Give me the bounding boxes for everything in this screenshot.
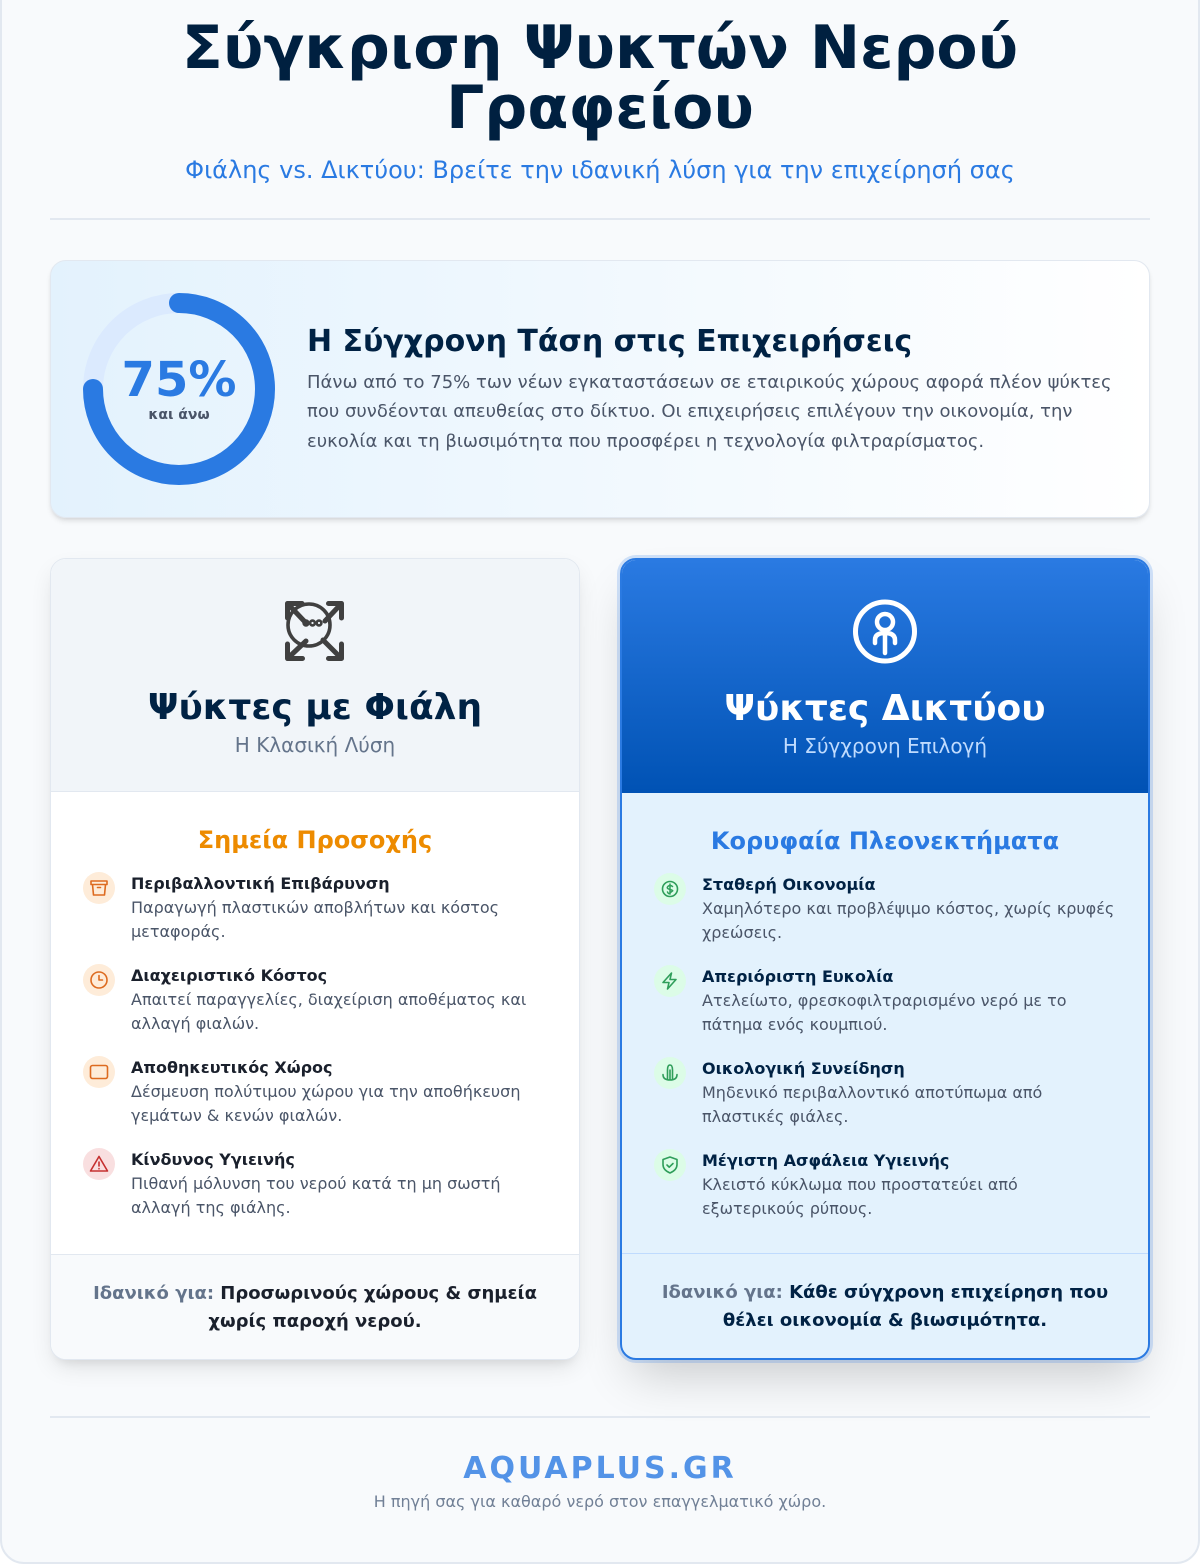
mains ideal-for footer: θέλει οικονομία & βιωσιμότητα. xyxy=(723,1310,1047,1331)
panel: mains coolers xyxy=(620,558,1150,1360)
donut caption: και άνω xyxy=(148,407,210,423)
cautions heading: Σημεία Προσοχής xyxy=(198,826,432,854)
panel: bottled coolers: αλλαγή της φιάλης. xyxy=(131,1198,291,1217)
panel: mains coolers: Οικολογική Συνείδηση xyxy=(702,1059,905,1078)
panel: bottled coolers: Παραγωγή πλαστικών αποβλήτων και κόστος xyxy=(131,898,499,917)
title: Σύγκριση Ψυκτών Νερού xyxy=(182,13,1018,83)
advantage 4 icon: shield xyxy=(654,1149,686,1181)
caution 1 icon: archive xyxy=(83,872,115,904)
advantage 1 icon: dollar xyxy=(654,873,686,905)
panel: mains coolers: Χαμηλότερο και προβλέψιμο κόστος, χωρίς κρυφές xyxy=(702,899,1114,918)
panel: bottled coolers: μεταφοράς. xyxy=(131,922,226,941)
caution 2 xyxy=(131,966,526,1033)
advantage 2 icon: bolt xyxy=(654,965,686,997)
advantages heading: Κορυφαία Πλεονεκτήματα xyxy=(711,827,1059,855)
mains ideal-for footer xyxy=(622,1253,1148,1358)
donut chart: 75% xyxy=(83,293,275,485)
icon: bottle cooler xyxy=(285,601,344,661)
panel: mains coolers: Μηδενικό περιβαλλοντικό αποτύπωμα από xyxy=(702,1083,1042,1102)
panel: bottled coolers xyxy=(50,558,580,1360)
mains ideal-for footer: Ιδανικό για: Κάθε σύγχρονη επιχείρηση που xyxy=(662,1282,1108,1303)
panel: trend hero xyxy=(50,260,1150,518)
subtitle: Φιάλης vs. Δικτύου: Βρείτε την ιδανική λύση για την επιχείρησή σας xyxy=(185,156,1015,184)
bottled header xyxy=(51,559,579,792)
mains subheading: Η Σύγχρονη Επιλογή xyxy=(783,734,987,758)
panel: mains coolers: Απεριόριστη Ευκολία xyxy=(702,967,893,986)
panel: mains coolers: πάτημα ενός κουμπιού. xyxy=(702,1015,887,1034)
hero text xyxy=(307,372,1112,452)
caution 2 icon: clock xyxy=(83,964,115,996)
donut value: 75% xyxy=(122,352,236,408)
mains header xyxy=(622,560,1148,793)
advantage 2 xyxy=(702,967,1067,1034)
advantage 1 xyxy=(702,875,1114,942)
advantage 3 xyxy=(702,1059,1042,1126)
advantage 3 icon: leaf xyxy=(654,1057,686,1089)
panel: bottled coolers: γεμάτων & κενών φιαλών. xyxy=(131,1106,342,1125)
bottled subheading: Η Κλασική Λύση xyxy=(235,733,395,757)
panel: bottled coolers: Κίνδυνος Υγιεινής xyxy=(131,1150,295,1169)
panel: bottled coolers: Διαχειριστικό Κόστος xyxy=(131,966,327,985)
title xyxy=(182,13,1018,143)
panel: mains coolers: εξωτερικούς ρύπους. xyxy=(702,1199,872,1218)
mains heading: Ψύκτες Δικτύου xyxy=(724,688,1046,729)
panel: mains coolers: Ατελείωτο, φρεσκοφιλτραρισμένο νερό με το xyxy=(702,991,1067,1010)
caution 1 xyxy=(131,874,499,941)
panel: mains coolers: πλαστικές φιάλες. xyxy=(702,1107,848,1126)
panel: mains coolers: Μέγιστη Ασφάλεια Υγιεινής xyxy=(702,1151,949,1170)
hero text: που συνδέονται απευθείας στο δίκτυο. Οι επιχειρήσεις επιλέγουν την οικονομία, την xyxy=(307,401,1072,422)
caution 4 xyxy=(131,1150,501,1217)
bottled ideal-for footer: Ιδανικό για: Προσωρινούς χώρους & σημεία xyxy=(93,1283,537,1304)
hero heading: Η Σύγχρονη Τάση στις Επιχειρήσεις xyxy=(307,324,912,359)
hero text: ευκολία και τη βιωσιμότητα που προσφέρει η τεχνολογία φιλτραρίσματος. xyxy=(307,431,984,452)
bottled ideal-for footer: χωρίς παροχή νερού. xyxy=(208,1311,422,1332)
caution 4 icon: warning xyxy=(83,1148,115,1180)
panel: bottled coolers: Απαιτεί παραγγελίες, διαχείριση αποθέματος και xyxy=(131,990,526,1009)
footer tagline: Η πηγή σας για καθαρό νερό στον επαγγελματικό χώρο. xyxy=(374,1492,826,1511)
panel: mains coolers: χρεώσεις. xyxy=(702,923,782,942)
caution 3 xyxy=(131,1058,520,1125)
panel: bottled coolers: Δέσμευση πολύτιμου χώρου για την αποθήκευση xyxy=(131,1082,520,1101)
brand name: AQUAPLUS.GR xyxy=(463,1451,737,1486)
icon: mains cooler xyxy=(853,600,917,664)
bottled heading: Ψύκτες με Φιάλη xyxy=(148,687,482,728)
advantage 4 xyxy=(702,1151,1018,1218)
panel: bottled coolers: αλλαγή φιαλών. xyxy=(131,1014,259,1033)
caution 3 icon: storage box xyxy=(83,1056,115,1088)
bottled ideal-for footer xyxy=(51,1254,579,1359)
hero text: Πάνω από το 75% των νέων εγκαταστάσεων σε εταιρικούς χώρους αφορά πλέον ψύκτες xyxy=(307,372,1112,393)
panel: bottled coolers: Πιθανή μόλυνση του νερού κατά τη μη σωστή xyxy=(131,1174,501,1193)
panel: bottled coolers: Περιβαλλοντική Επιβάρυνση xyxy=(131,874,390,893)
panel: bottled coolers: Αποθηκευτικός Χώρος xyxy=(131,1058,333,1077)
panel: mains coolers: Κλειστό κύκλωμα που προστατεύει από xyxy=(702,1175,1018,1194)
panel: mains coolers: Σταθερή Οικονομία xyxy=(702,875,876,894)
title: Γραφείου xyxy=(446,73,754,143)
